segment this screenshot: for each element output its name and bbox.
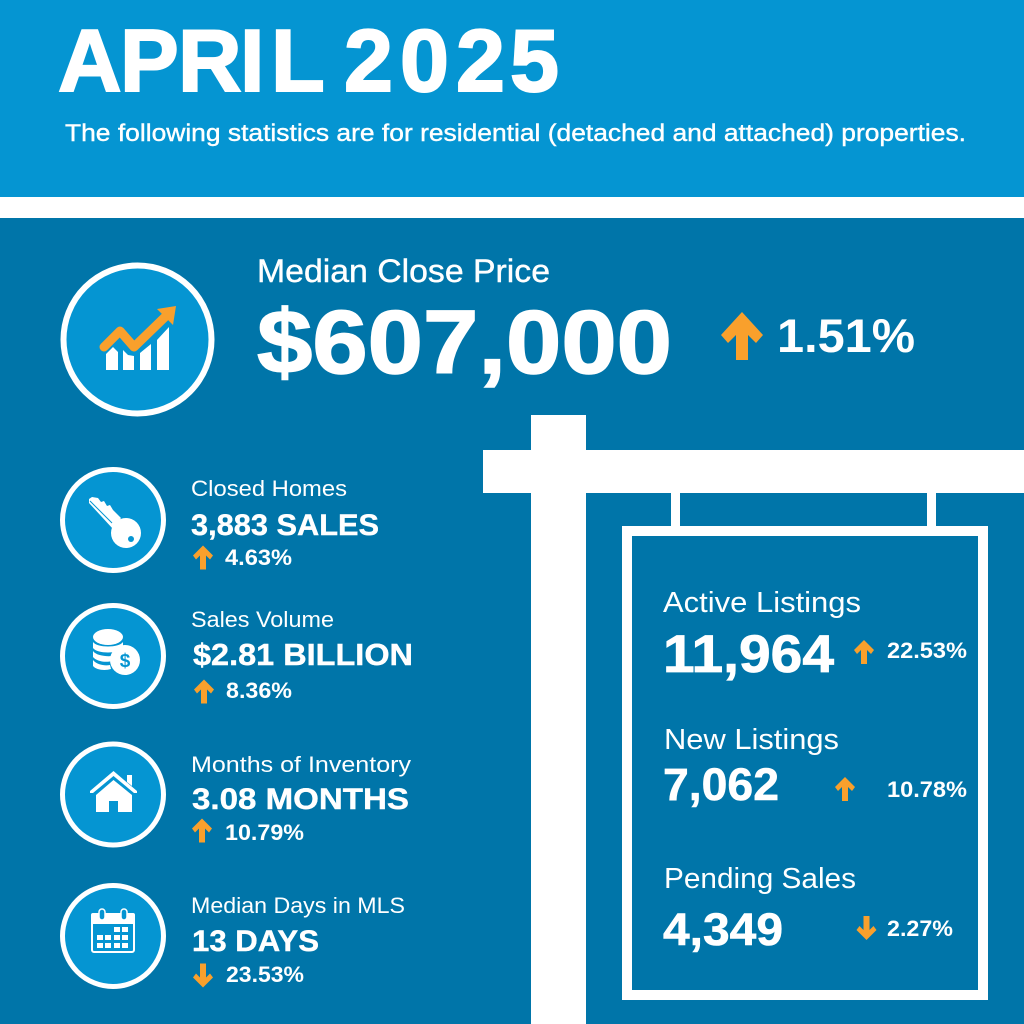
value: pending sales: 4,349 [663,904,783,955]
label: active listings: Active Listings [663,587,861,619]
icon: coins [62,606,164,706]
value: closed homes: 3,883 SALES [191,509,379,542]
change: new listings: 10.78% [887,777,967,802]
value: sales volume: $2.81 BILLION [193,637,413,672]
change: months of inventory: 10.79% [225,820,304,845]
label: median close price: Median Close Price [257,253,550,289]
change: closed homes: 4.63% [225,545,292,570]
change: median days in mls: 23.53% [226,962,304,987]
change: median close price: 1.51% [777,309,915,362]
panel: months of inventory [62,744,412,845]
icon: down arrow [193,964,213,988]
panel: hanging sign [627,531,983,995]
value: months of inventory: 3.08 MONTHS [192,783,409,816]
icon: up arrow [194,680,214,704]
panel: median close price [64,253,915,414]
label: pending sales: Pending Sales [664,863,856,895]
value: active listings: 11,964 [663,625,835,684]
label: months of inventory: Months of Inventory [191,752,412,777]
panel: median days in mls [62,886,405,988]
change: active listings: 22.53% [887,638,967,663]
icon: up arrow [854,640,874,664]
icon: rising chart [64,266,212,414]
label: sales volume: Sales Volume [191,607,334,632]
panel: main background [0,218,1024,1024]
icon: up arrow [835,777,855,801]
change: sales volume: 8.36% [226,678,292,703]
value: new listings: 7,062 [663,759,779,810]
icon: sign post [483,415,1024,1024]
value: median close price: $607,000 [257,293,672,393]
panel: header background [0,0,1024,197]
label: new listings: New Listings [664,724,839,756]
icon: key [62,470,164,570]
title: APRIL 2025 [58,11,559,110]
icon: house [62,744,164,845]
icon: coins: $ [120,651,131,672]
sign frame [627,531,983,995]
icon: calendar [62,886,164,986]
label: median days in mls: Median Days in MLS [191,893,405,918]
divider band [0,197,1024,218]
icon: up arrow [721,312,763,360]
panel: sales volume [62,606,413,706]
change: pending sales: 2.27% [887,916,953,941]
icon: down arrow [856,916,876,940]
panel: closed homes [62,470,379,570]
label: closed homes: Closed Homes [191,476,347,501]
icon: up arrow [192,818,212,842]
value: median days in mls: 13 DAYS [192,925,319,958]
icon: up arrow [193,546,213,570]
subtitle: The following statistics are for residential (detached and attached) properties. [65,120,966,147]
